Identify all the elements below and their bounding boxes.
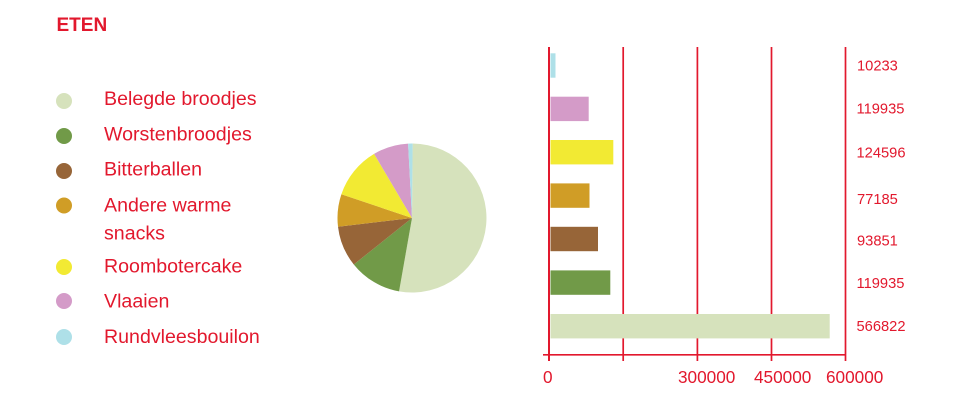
legend item: Bitterballen: [56, 159, 202, 181]
axis labels: 600000: [826, 367, 883, 387]
bar: Vlaaien: [550, 97, 589, 121]
value labels: 10233: [857, 58, 898, 74]
slice: Belegde broodjes: [399, 144, 486, 292]
value labels: [856, 58, 906, 335]
legend item: Andere warme snacks: [56, 194, 232, 245]
legend item: Vlaaien: [56, 290, 169, 312]
axis labels: 0: [543, 367, 553, 387]
bar: Andere warme snacks: [550, 183, 590, 208]
bar: Roombotercake: [550, 140, 613, 164]
legend item: Bitterballen: Bitterballen: [104, 159, 202, 181]
legend item: Andere warme snacks: snacks: [104, 223, 165, 245]
legend item: Rundvleesbouilon: Rundvleesbouilon: [104, 326, 260, 348]
slice: Roombotercake: [341, 154, 412, 218]
chart bars: [550, 53, 830, 338]
value labels: 93851: [857, 234, 898, 250]
axis labels: 450000: [754, 367, 811, 387]
axis labels: [543, 367, 883, 387]
slice: Vlaaien: [374, 144, 412, 218]
bar: Rundvleesbouilon: [550, 53, 556, 78]
bar: Belegde broodjes: [550, 314, 830, 338]
legend item: Vlaaien: Vlaaien: [104, 290, 169, 312]
slice: Bitterballen: [338, 218, 412, 264]
axis labels: 300000: [678, 367, 735, 387]
bar chart: [543, 47, 906, 387]
value labels: 119935: [856, 102, 904, 118]
slice: Andere warme snacks: [338, 194, 412, 227]
title: ETEN: [56, 15, 107, 36]
chart axes and gridlines: [543, 47, 846, 361]
slice: Rundvleesbouilon: [408, 143, 413, 218]
pie chart: [338, 143, 486, 292]
legend item: Andere warme snacks: Andere warme: [104, 194, 232, 216]
legend item: Belegde broodjes: Belegde broodjes: [104, 88, 257, 110]
value labels: 566822: [856, 319, 906, 335]
bar: Bitterballen: [550, 227, 598, 251]
legend: [56, 88, 260, 348]
slice: Worstenbroodjes: [354, 218, 412, 291]
value labels: 119935: [856, 276, 904, 292]
bar: Worstenbroodjes: [550, 270, 610, 295]
legend item: Roombotercake: Roombotercake: [104, 256, 242, 278]
legend item: Worstenbroodjes: Worstenbroodjes: [104, 124, 252, 146]
value labels: 124596: [856, 145, 906, 161]
value labels: 77185: [857, 192, 898, 208]
